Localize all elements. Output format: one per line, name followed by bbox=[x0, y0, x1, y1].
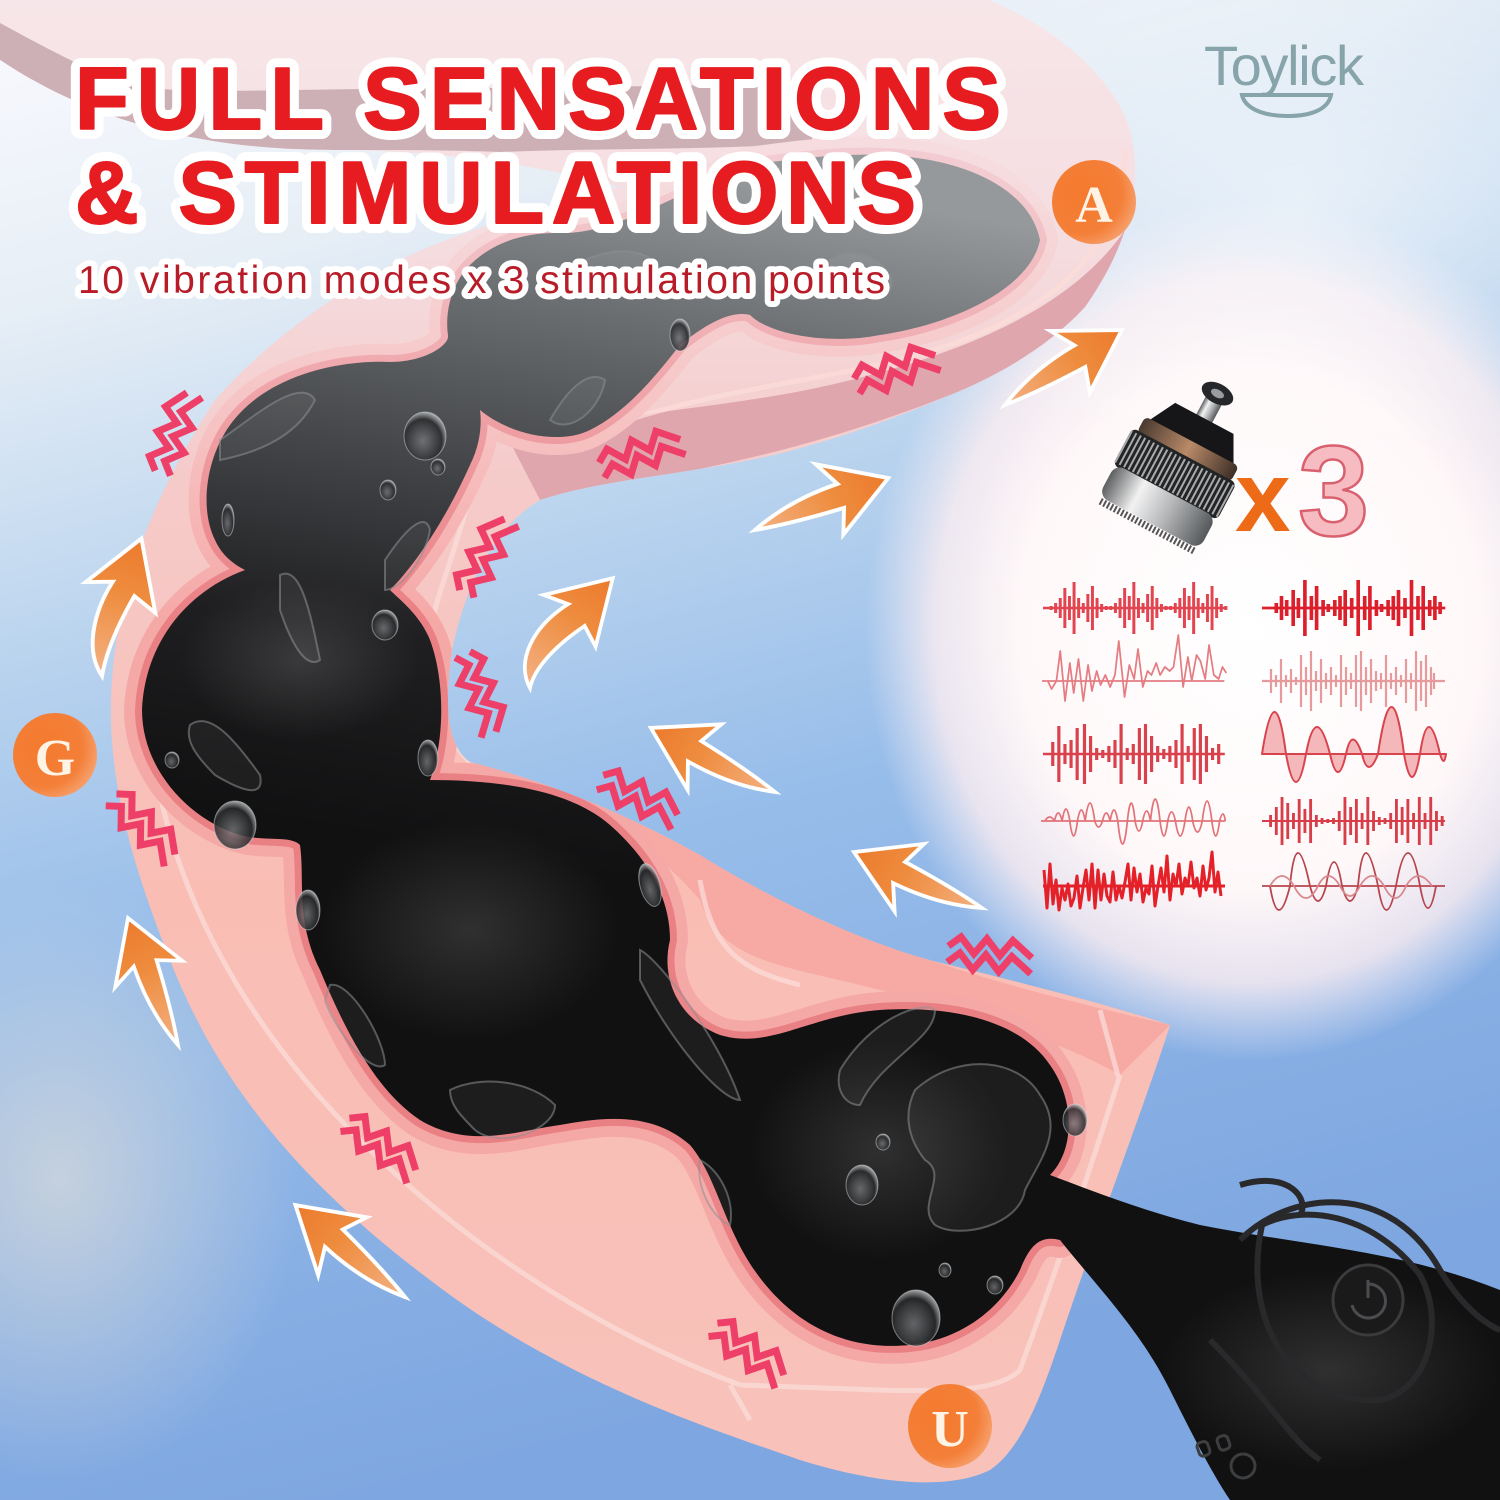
anatomical tube illustration bbox=[0, 0, 1170, 1482]
number 3: 3 bbox=[1298, 420, 1369, 563]
orange arrows bbox=[62, 298, 1141, 1327]
zigzag 9 bbox=[337, 1110, 425, 1183]
power button bbox=[1333, 1265, 1403, 1335]
title: FULL SENSATIONS bbox=[75, 49, 1001, 148]
vibration zigzag marks bbox=[102, 340, 1033, 1388]
badge G bbox=[13, 713, 97, 797]
arrow 6 bbox=[62, 527, 174, 685]
wave left 3 bbox=[1043, 724, 1225, 784]
darker lower wall, upper section bbox=[510, 230, 1135, 500]
arrow 7 bbox=[93, 905, 210, 1059]
zigzag 1 bbox=[146, 388, 202, 478]
arrow 3 bbox=[494, 551, 635, 705]
zigzag 3 bbox=[596, 424, 686, 483]
arrow 5 bbox=[839, 819, 996, 943]
arrow 4 bbox=[633, 696, 791, 826]
logo: Toylick: Toylick bbox=[1204, 34, 1365, 97]
wave right 2 bbox=[1262, 651, 1445, 711]
x multiplier: x bbox=[1235, 441, 1291, 553]
wave right 3 bbox=[1262, 707, 1446, 782]
vibration waveforms bbox=[1041, 580, 1446, 910]
zigzag 10 bbox=[705, 1315, 793, 1388]
subtitle: 10 vibration modes x 3 stimulation points bbox=[78, 259, 885, 302]
wave left 4 bbox=[1041, 799, 1225, 844]
zigzag 8 bbox=[947, 936, 1033, 974]
wave right 5 bbox=[1262, 853, 1445, 910]
subtitle: 10 vibration modes x 3 stimulation points bbox=[78, 259, 885, 302]
inner folds bbox=[150, 150, 1125, 1420]
handle contour ridges bbox=[1210, 1181, 1500, 1460]
motor icon bbox=[1095, 357, 1274, 554]
badge A bbox=[1052, 160, 1136, 244]
wave right 4 bbox=[1262, 797, 1445, 845]
charging contacts bbox=[1196, 1434, 1255, 1478]
wave left 2 bbox=[1042, 635, 1226, 701]
water droplets bbox=[165, 319, 1087, 1346]
badge U: U bbox=[931, 1401, 969, 1458]
badge A: A bbox=[1075, 177, 1113, 234]
badge U bbox=[908, 1384, 992, 1468]
zigzag 2 bbox=[851, 340, 941, 399]
grey lining band bbox=[0, 23, 812, 152]
badge G: G bbox=[35, 730, 75, 787]
wave right 1 bbox=[1262, 580, 1445, 636]
wave left 1 bbox=[1043, 582, 1226, 634]
arrow 1 bbox=[985, 298, 1141, 435]
arrow 2 bbox=[741, 442, 901, 564]
zigzag 5 bbox=[450, 648, 511, 738]
title bbox=[75, 49, 1001, 242]
surface sheen bbox=[180, 580, 1500, 1470]
title: & STIMULATIONS bbox=[75, 143, 916, 242]
title: FULL SENSATIONS bbox=[75, 49, 1001, 148]
zigzag 6 bbox=[594, 766, 684, 830]
arrow 8 bbox=[270, 1177, 428, 1327]
wave left 5 bbox=[1043, 852, 1225, 910]
zigzag 4 bbox=[451, 511, 519, 601]
wet patches bbox=[189, 251, 1051, 1231]
salmon rim around device bbox=[142, 155, 1069, 1346]
title: & STIMULATIONS bbox=[75, 143, 916, 242]
zigzag 7 bbox=[102, 786, 186, 866]
inner wall highlight, lower section bbox=[470, 762, 1170, 1075]
